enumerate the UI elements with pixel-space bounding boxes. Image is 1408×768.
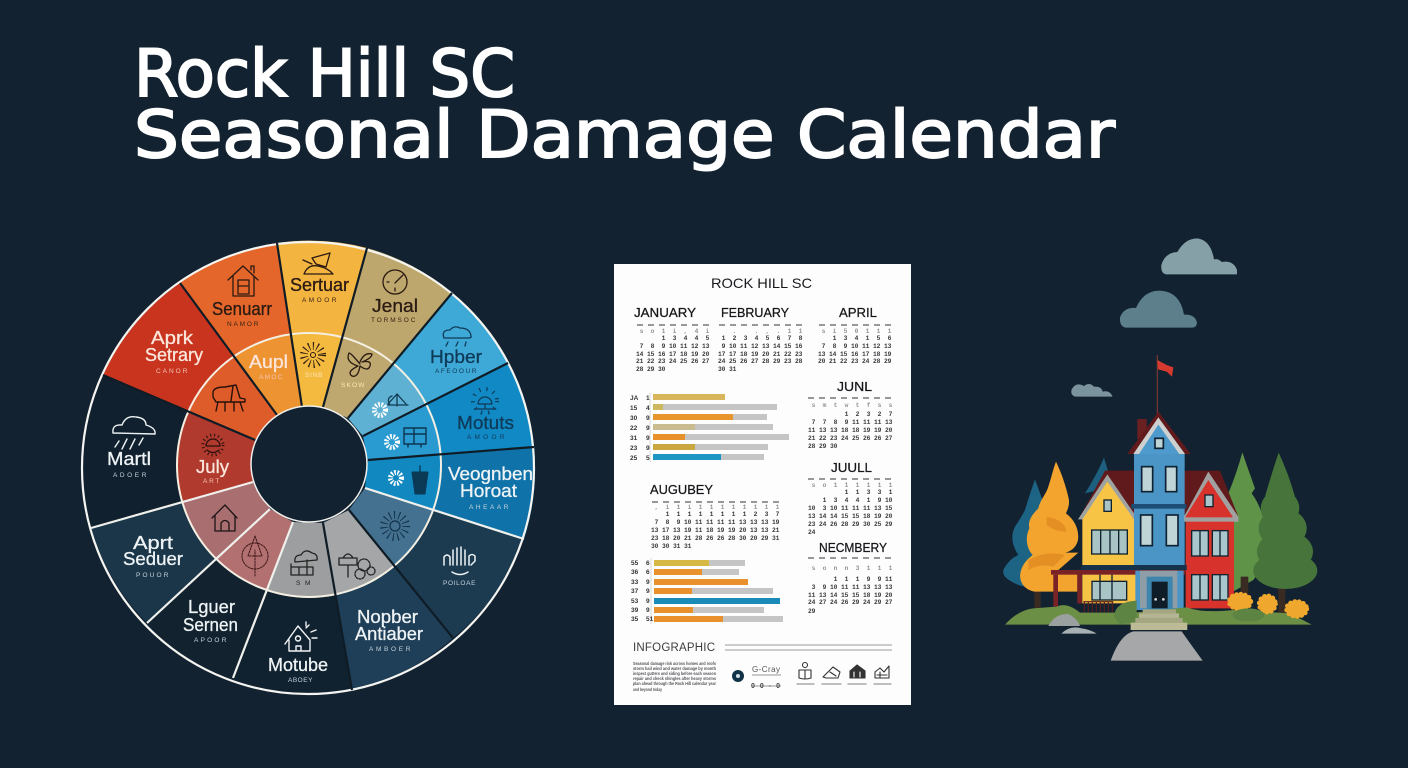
calendar: Junl: JUNL [837, 379, 872, 394]
bar chart: lower [631, 558, 783, 624]
icon: rain cloud white [113, 417, 155, 449]
calendar: Necmbery: 11 13 14 15 15 18 19 20 [808, 592, 893, 599]
icon: navy sun [384, 515, 406, 537]
driveway [1111, 631, 1203, 661]
bar chart: lower: 33 [631, 579, 639, 586]
porch roof [1052, 565, 1187, 571]
bar chart: lower: 9 [646, 588, 650, 595]
tree: back teal left [1003, 479, 1049, 587]
porch beam [1051, 570, 1186, 575]
tree: light green [1228, 452, 1265, 593]
wheel month labels: Jenal [372, 296, 418, 316]
wheel ring outlines [82, 242, 534, 694]
calendar: January: 14 15 16 17 18 19 20 [636, 351, 710, 358]
wheel small captions: TORMSOC [371, 317, 416, 324]
calendar: Augubey: , i 1 i 1 1 1 1 1 1 1 1 [651, 504, 780, 511]
icon: clock [383, 270, 407, 294]
calendar: February: 17 17 18 19 20 21 22 23 [718, 351, 803, 358]
bar chart: lower: 9 [646, 607, 650, 614]
calendar: February [718, 305, 803, 373]
bar chart: upper: 22 [630, 425, 638, 432]
wheel small captions: AMOC [259, 374, 283, 381]
calendar: Juull: 13 14 14 15 15 18 19 20 [808, 513, 893, 520]
icon: post and flower [339, 554, 375, 579]
bar chart: lower: 53 [631, 598, 639, 605]
footer badge: G-Cray [752, 665, 780, 674]
calendar: Juull: 24 [808, 529, 816, 536]
calendar: January: JANUARY [634, 305, 696, 320]
tower roof [1127, 412, 1191, 454]
calendar: April: 20 21 22 23 24 28 29 [818, 358, 892, 365]
wheel month labels [107, 275, 533, 675]
footer badge [732, 665, 781, 690]
bar chart: upper: 9 [646, 445, 650, 452]
calendar: Necmbery: 29 [808, 608, 816, 615]
bar chart: lower: 35 [631, 616, 639, 623]
calendar: Augubey [650, 482, 782, 550]
tree: orange [1020, 462, 1078, 592]
wheel centre hole [251, 406, 367, 522]
seasonal wheel chart [82, 241, 535, 694]
bar chart: lower: 37 [631, 588, 639, 595]
calendar: Necmbery: 3 9 10 11 11 13 13 13 [808, 584, 893, 591]
title: Rock Hill SC [134, 37, 515, 112]
icon: rain cloud [443, 327, 471, 346]
steps [1131, 609, 1187, 630]
wheel month labels: Hpber [430, 347, 482, 367]
calendar: Junl: 7 7 8 9 11 11 11 13 [808, 419, 893, 426]
icon: cloud and building [291, 551, 317, 575]
wheel small captions: ABOEY [288, 677, 313, 684]
icon: house small [212, 505, 237, 531]
calendar: January: 21 22 23 24 25 26 27 [636, 358, 710, 365]
wheel month labels: Sernen [183, 615, 238, 635]
footer paragraph: and beyond today [633, 687, 662, 692]
chimney [1137, 419, 1147, 439]
tower band [1131, 504, 1186, 509]
cloud: middle [1120, 291, 1197, 328]
icon: sun and arrow house [374, 394, 408, 416]
footer paragraph: inspect gutters and siding before each season [633, 671, 716, 676]
bar chart: upper: 9 [646, 415, 650, 422]
calendar: Necmbery: 1 1 1 9 9 11 [808, 576, 893, 583]
cloud: top [1161, 238, 1237, 274]
calendar: Junl [808, 379, 893, 450]
calendar: April: 13 14 15 16 17 18 19 [818, 351, 892, 358]
yellow wing windows [1092, 500, 1127, 554]
bar chart: lower: 39 [631, 607, 639, 614]
bar chart: upper: 1 [646, 395, 650, 402]
calendar: April: APRIL [839, 305, 877, 320]
wheel month labels: Lguer [188, 597, 235, 617]
shrubs [1114, 594, 1307, 624]
bar chart: upper: 30 [630, 415, 638, 422]
porch railing [1083, 602, 1113, 613]
ground [1005, 605, 1312, 625]
wheel month labels: Senuarr [212, 299, 272, 319]
tower gable trim [1133, 417, 1185, 454]
red wing band [1184, 517, 1238, 522]
wheel month labels: Antiaber [355, 624, 423, 644]
bar chart: upper: 9 [646, 425, 650, 432]
rocks [1048, 614, 1097, 634]
calendar: April: 1 3 4 1 5 6 [818, 335, 892, 342]
bar chart: upper: 4 [646, 405, 650, 412]
house illustration [1003, 238, 1317, 661]
icon: columns [444, 547, 475, 574]
wheel month labels: Horoat [460, 481, 517, 501]
infographic footer heading: INFOGRAPHIC [633, 642, 715, 654]
bar chart: upper [630, 393, 789, 462]
icon: roof map [822, 667, 841, 684]
calendar: Junl: 21 22 23 24 25 26 26 27 [808, 435, 893, 442]
calendar: January: 7 8 9 10 11 12 13 [636, 343, 710, 350]
icon: leaf [348, 353, 372, 376]
bar chart: upper: 15 [630, 405, 638, 412]
calendar: Juull: 23 24 26 28 29 30 25 29 [808, 521, 893, 528]
calendar: Augubey: 30 30 31 31 [651, 543, 692, 550]
footer paragraph: plan ahead through the Rock Hill calendar year [633, 681, 716, 686]
paper heading: ROCK HILL SC [711, 275, 812, 291]
calendar: January: 28 29 30 [636, 366, 666, 373]
calendar: Necmbery: s o n n 3 1 1 1 [808, 565, 893, 572]
bar chart: upper: 5 [646, 455, 650, 462]
calendar: Necmbery: NECMBERY [819, 540, 887, 555]
bar chart: lower: 9 [646, 579, 650, 586]
calendar: Juull: 10 3 10 11 11 11 13 15 [808, 505, 893, 512]
paper sheet [614, 264, 911, 705]
wheel month labels: Aprk [151, 328, 194, 348]
wheel small captions: SM [296, 580, 311, 587]
wheel month labels: Martl [107, 449, 151, 469]
icon: bulb sun [473, 389, 497, 413]
calendar: Augubey: AUGUBEY [650, 482, 713, 497]
calendar: Juull: s o 1 1 1 1 1 1 [808, 482, 893, 489]
wheel month labels: Sertuar [290, 275, 349, 295]
footer badge: 00-0 [751, 683, 780, 690]
yellow wing trim [1078, 474, 1134, 519]
title: Seasonal Damage Calendar [134, 98, 1115, 173]
icon: figures [797, 662, 814, 684]
tower windows [1141, 438, 1178, 546]
yellow wing [1082, 482, 1134, 565]
wheel month labels: Aupl [249, 352, 288, 372]
tree: orange shade [1028, 517, 1067, 570]
calendar: Juull: 1 1 3 3 1 [808, 489, 893, 496]
wheel small captions: CANOR [156, 368, 188, 375]
wheel month labels: Motuts [457, 413, 514, 433]
wheel small captions: AMOOR [302, 297, 337, 304]
calendar: January [634, 305, 710, 373]
wheel small captions: NAMOR [227, 321, 259, 328]
trunks [1034, 577, 1285, 618]
bar chart: lower: 36 [631, 569, 639, 576]
footer paragraph [633, 661, 716, 692]
icon: houses row [874, 666, 891, 684]
icon: sun and bucket [390, 466, 428, 494]
icon: dashed star [242, 536, 268, 576]
calendar: Juull [808, 460, 893, 536]
calendar: Junl: 1 2 3 2 7 [808, 411, 893, 418]
calendar: February: 1 2 3 4 5 6 7 8 [718, 335, 803, 342]
icon: sun and box [386, 428, 426, 448]
wheel month labels: Veognben [448, 464, 533, 484]
wheel small captions: ART [203, 478, 220, 485]
tower [1134, 450, 1185, 567]
wheel small captions: ADOER [113, 472, 147, 479]
calendar: Augubey: 1 1 1 1 1 1 1 1 2 3 7 [651, 511, 780, 518]
icon: house [228, 266, 258, 296]
wheel month labels: Seduer [123, 549, 183, 569]
calendar: Augubey: 23 18 20 21 28 26 26 28 30 20 29 31 [651, 535, 780, 542]
wheel small captions: POUOR [136, 572, 169, 579]
wheel small captions: AHEAAR [469, 504, 509, 511]
calendar: Augubey: 7 8 9 10 11 11 11 11 13 13 13 19 [651, 519, 780, 526]
calendar: April: 7 8 9 10 11 12 13 [818, 343, 892, 350]
calendar: February: 9 10 11 12 13 14 15 16 [718, 343, 803, 350]
wheel month labels: Setrary [145, 345, 203, 365]
wheel small captions: POILOAE [443, 580, 476, 587]
wheel inner ring sectors [178, 335, 440, 596]
bar chart: lower: 51 [646, 616, 654, 623]
house roof back [1080, 471, 1238, 517]
bar chart: lower: 6 [646, 560, 650, 567]
tower gable [1139, 425, 1179, 454]
wheel small captions: APOOR [194, 637, 227, 644]
wheel outer sectors [83, 241, 535, 693]
wheel small captions: AFEOOUR [435, 368, 477, 375]
flag [1157, 355, 1173, 413]
calendar: February: . . , . 1 1 [718, 328, 803, 335]
bar chart: lower: 6 [646, 569, 650, 576]
footer paragraph: Seasonal damage risk across homes and roofs [633, 661, 716, 666]
red wing windows [1192, 495, 1228, 600]
wheel icons [113, 253, 497, 651]
wheel month labels: Motube [268, 655, 328, 675]
calendar: Necmbery: 24 27 24 26 29 24 29 27 [808, 599, 893, 606]
bar chart: upper: 23 [630, 445, 638, 452]
calendar: February: FEBRUARY [721, 305, 789, 320]
calendar: Augubey: 13 17 13 19 11 18 19 19 20 13 13 21 [651, 527, 780, 534]
footer icons [797, 662, 891, 684]
wheel small captions: AMBOER [369, 646, 411, 653]
wheel dividers [91, 243, 534, 690]
wheel month labels: July [196, 457, 229, 477]
wheel small captions: SINB [305, 372, 323, 379]
wheel small captions [113, 297, 509, 684]
icon: small sun [203, 435, 223, 455]
wheel small captions: SKOW [341, 382, 365, 389]
calendar: Junl: s m t w t f s s [808, 402, 893, 409]
calendar: January: 1 3 4 4 5 [636, 335, 710, 342]
icon: star sun [304, 346, 322, 364]
wheel month labels: Aprt [133, 533, 173, 553]
calendar: January: s o 1 i , 4 i [636, 328, 710, 335]
footer paragraph: storm hail wind and water damage by month [633, 666, 716, 671]
red wing [1186, 480, 1234, 608]
calendar: Junl: 11 13 13 18 18 19 19 20 [808, 427, 893, 434]
icon: house burst [285, 622, 317, 651]
calendar: Junl: 28 29 30 [808, 443, 838, 450]
calendar: Juull: 1 3 4 4 1 9 10 [808, 497, 893, 504]
calendar: April [818, 305, 892, 365]
icon: table [213, 385, 245, 411]
bar chart: upper: 25 [630, 455, 638, 462]
calendar: February: 30 31 [718, 366, 737, 373]
cloud: small [1071, 384, 1112, 397]
calendar: Necmbery [808, 540, 893, 615]
bar chart: upper: JA [630, 395, 639, 402]
lower yellow wall [1082, 573, 1136, 603]
icon: home [848, 665, 866, 684]
porch window [1092, 575, 1127, 600]
red wing trim [1184, 472, 1238, 522]
entrance [1135, 571, 1184, 610]
porch posts [1053, 575, 1082, 607]
title [134, 37, 1115, 173]
calendar: February: 24 25 26 27 28 29 23 28 [718, 358, 803, 365]
bar chart: lower: 9 [646, 598, 650, 605]
calendar paper [614, 264, 911, 705]
bar chart: lower: 55 [631, 560, 639, 567]
icon: trowel [303, 253, 333, 274]
tree: back teal centre [1085, 458, 1113, 493]
bar chart: upper: 9 [646, 435, 650, 442]
footer paragraph: repair and check shingles after heavy storms [633, 676, 716, 681]
calendar: April: s i 5 0 1 1 1 [818, 328, 892, 335]
wheel small captions: AMOOR [467, 434, 505, 441]
calendar: Juull: JUULL [831, 460, 872, 475]
bar chart: upper: 31 [630, 435, 638, 442]
wheel month labels: Nopber [357, 607, 418, 627]
tree: dark green [1253, 453, 1317, 589]
footer rules [725, 645, 892, 650]
